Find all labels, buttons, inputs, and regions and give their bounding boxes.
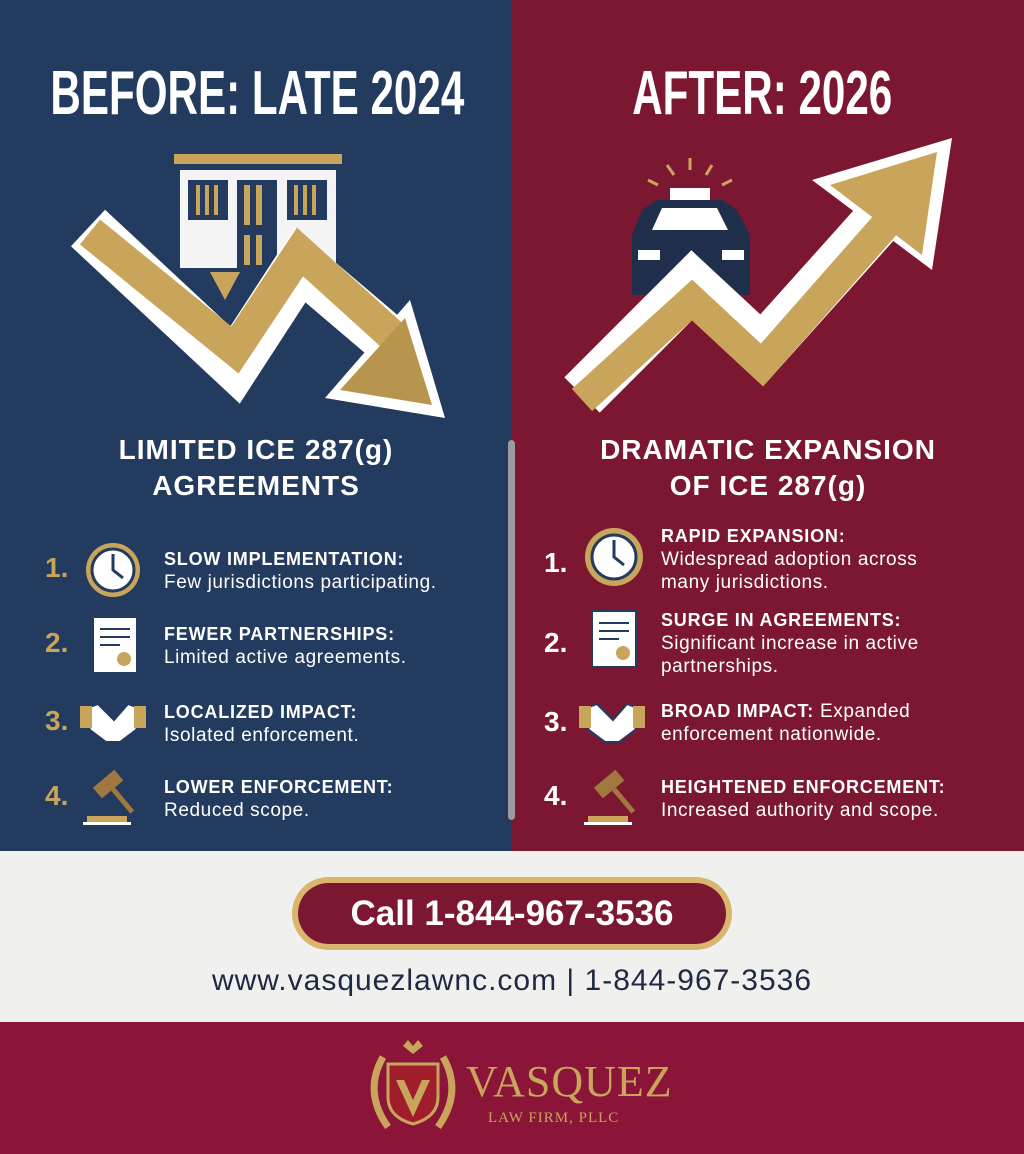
item 3: 3.: [544, 706, 567, 737]
item 4: Reduced scope.: [164, 800, 310, 821]
item 2: 2.: [544, 627, 567, 658]
logo: LAW FIRM, PLLC: [488, 1110, 619, 1126]
call button: [292, 877, 732, 950]
item 4: HEIGHTENED ENFORCEMENT:: [661, 777, 945, 797]
item 1: Few jurisdictions participating.: [164, 572, 437, 593]
item 1: SLOW IMPLEMENTATION:: [164, 549, 404, 569]
item 1: Widespread adoption across: [661, 549, 917, 570]
item 1: 1.: [544, 547, 567, 578]
heading: dramatic: [600, 434, 936, 501]
item 3: [45, 702, 359, 746]
logo: [370, 1040, 673, 1129]
logo: VASQUEZ: [466, 1057, 673, 1106]
title: after: AFTER: 2026: [632, 59, 892, 128]
item 3: LOCALIZED IMPACT:: [164, 702, 357, 722]
item 3: 3.: [45, 705, 68, 736]
item 2: SURGE IN AGREEMENTS:: [661, 610, 901, 630]
list: before items: [45, 543, 437, 825]
item 1: [45, 543, 437, 597]
heading: limited: AGREEMENTS: [152, 470, 360, 501]
item 1: many jurisdictions.: [661, 572, 829, 593]
heading: limited: LIMITED ICE 287(g): [119, 434, 393, 465]
divider: [508, 440, 515, 820]
item 2: [544, 610, 919, 677]
item 1: [544, 526, 917, 593]
item 2: Limited active agreements.: [164, 647, 407, 668]
item 1: RAPID EXPANSION:: [661, 526, 846, 546]
item 2: [45, 618, 407, 672]
item 2: partnerships.: [661, 656, 779, 677]
item 3: [544, 701, 910, 745]
list: after items: [544, 526, 945, 825]
item 4: [544, 770, 945, 825]
heading: dramatic: DRAMATIC EXPANSION: [600, 434, 936, 465]
panel: before: [0, 0, 512, 851]
item 2: 2.: [45, 627, 68, 658]
item 3: enforcement nationwide.: [661, 724, 882, 745]
item 3: Isolated enforcement.: [164, 725, 359, 746]
title: before: BEFORE: LATE 2024: [50, 59, 464, 128]
illustration: police car with up arrow: [564, 138, 952, 413]
contact line: www.vasquezlawnc.com | 1-844-967-3536: [212, 964, 812, 997]
heading: limited: [119, 434, 393, 501]
item 2: FEWER PARTNERSHIPS:: [164, 624, 395, 644]
item 3: BROAD IMPACT: Expanded: [661, 701, 910, 722]
item 4: Increased authority and scope.: [661, 800, 939, 821]
call button: Call 1-844-967-3536: [350, 894, 674, 933]
footer: [0, 1022, 1024, 1154]
item 4: LOWER ENFORCEMENT:: [164, 777, 393, 797]
item 4: 4.: [544, 780, 567, 811]
illustration: jail with down arrow: [71, 154, 445, 418]
item 2: Significant increase in active: [661, 633, 919, 654]
item 4: 4.: [45, 780, 68, 811]
heading: dramatic: OF ICE 287(g): [670, 470, 866, 501]
item 1: 1.: [45, 552, 68, 583]
item 4: [45, 770, 393, 825]
panel: after: [512, 0, 1024, 851]
